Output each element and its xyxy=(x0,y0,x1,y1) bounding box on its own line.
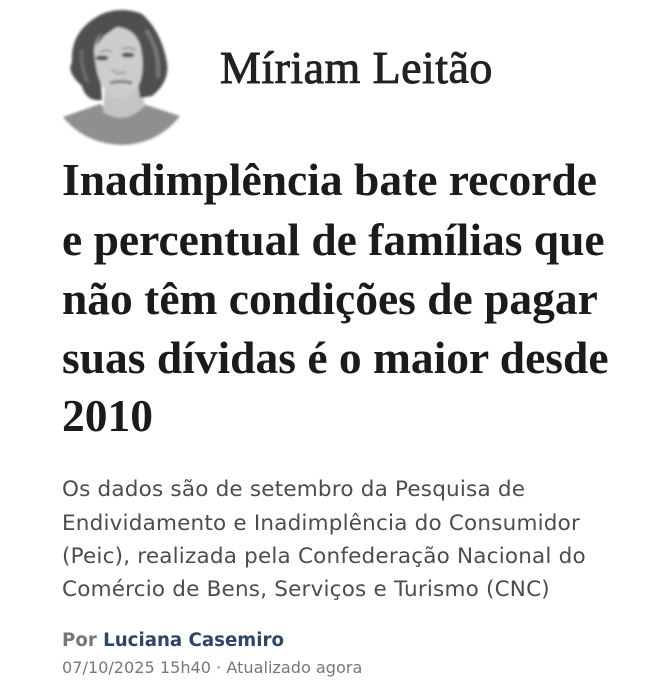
headline xyxy=(62,154,609,441)
subheading text: Endividamento e Inadimplência do Consumidor xyxy=(62,511,580,536)
headline: 2010 xyxy=(62,390,153,441)
byline: Por Luciana Casemiro xyxy=(62,630,284,651)
headline: suas dívidas é o maior desde xyxy=(62,332,609,383)
subheading text: (Peic), realizada pela Confederação Nacional do xyxy=(62,544,586,569)
icon: author portrait xyxy=(62,8,181,147)
headline: e percentual de famílias que xyxy=(62,214,605,265)
subheading text: Comércio de Bens, Serviços e Turismo (CNC) xyxy=(62,577,550,602)
author name: Míriam Leitão xyxy=(220,42,493,93)
date and update time: 07/10/2025 15h40 · Atualizado agora xyxy=(62,658,362,677)
headline: não têm condições de pagar xyxy=(62,273,598,324)
subheading text xyxy=(62,477,586,602)
subheading text: Os dados são de setembro da Pesquisa de xyxy=(62,477,525,502)
headline: Inadimplência bate recorde xyxy=(62,154,597,205)
